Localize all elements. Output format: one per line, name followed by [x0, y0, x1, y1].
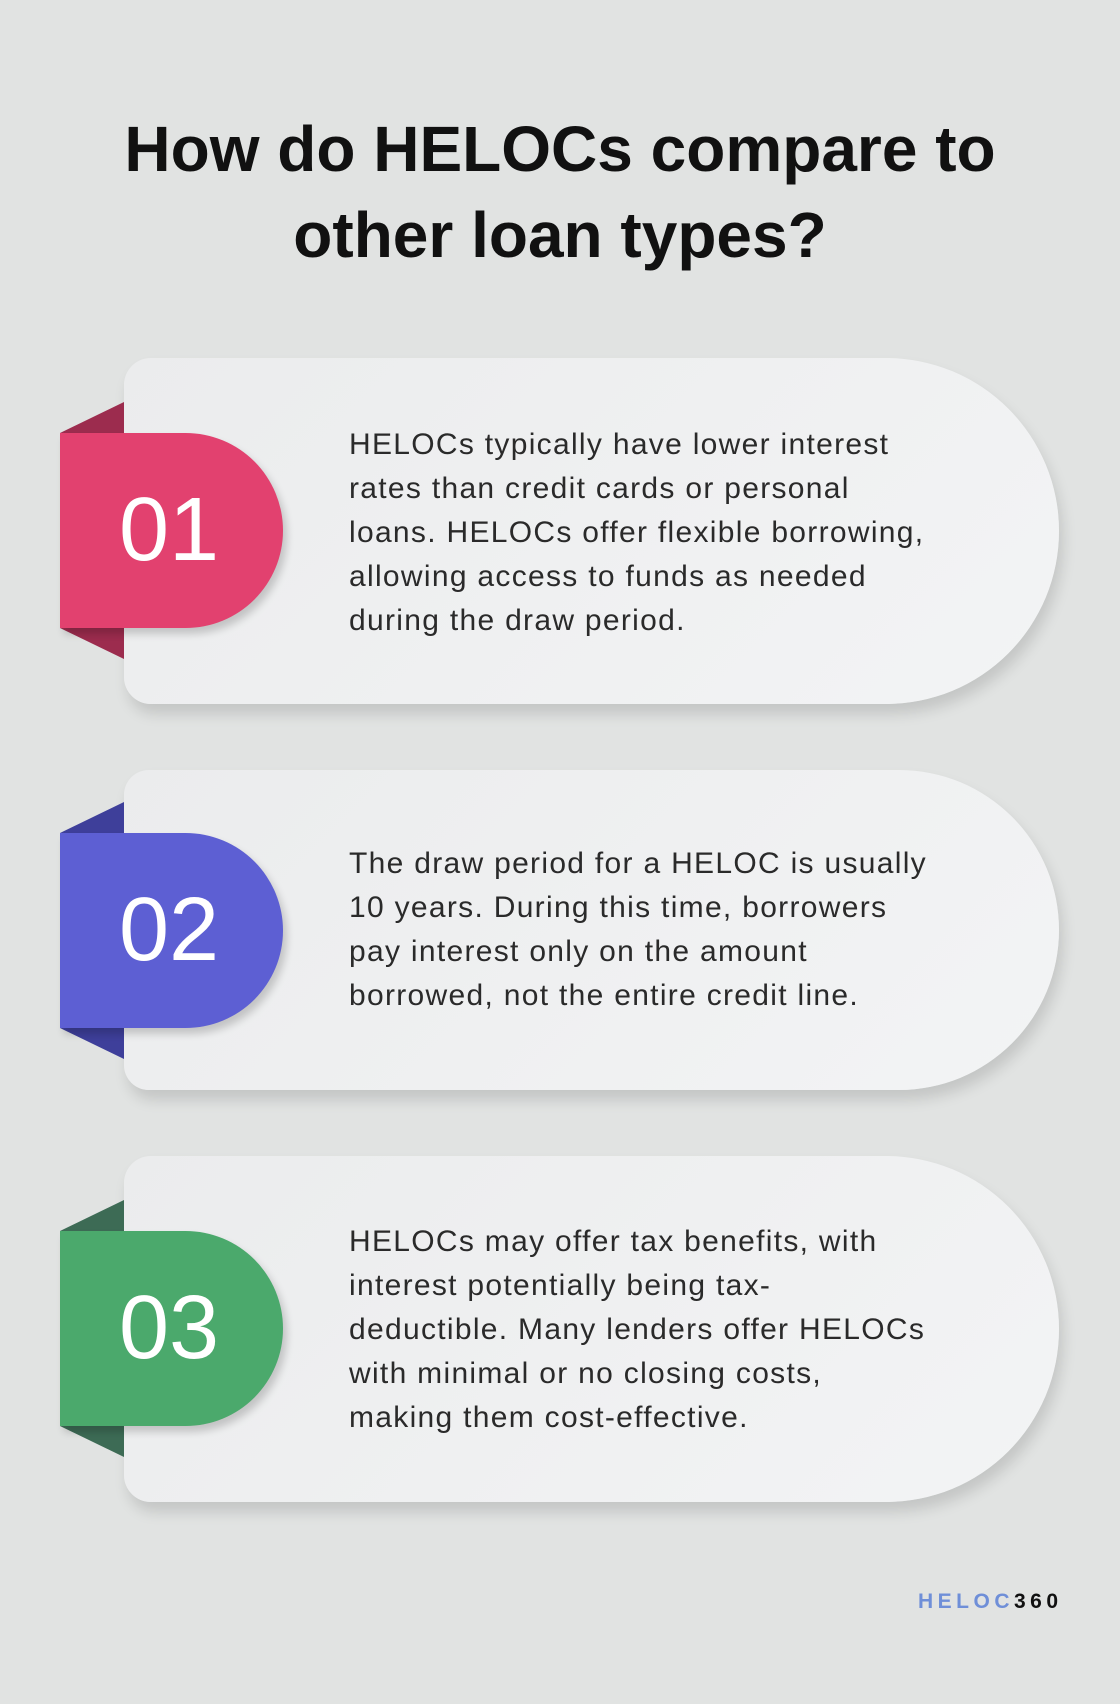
number tab 03 [60, 1231, 283, 1426]
title [124, 113, 996, 271]
text block 2: The draw period for a HELOC is usually [349, 847, 927, 880]
text block 3 [349, 1225, 925, 1434]
text block 1: HELOCs typically have lower interest [349, 428, 889, 461]
text block 1: allowing access to funds as needed [349, 560, 867, 593]
number tab 01 [60, 433, 283, 628]
text block 1: rates than credit cards or personal [349, 472, 850, 505]
text block 3: with minimal or no closing costs, [349, 1357, 822, 1390]
panel: card 1 [124, 358, 1059, 704]
text block 2 [349, 847, 927, 1012]
text block 1: loans. HELOCs offer flexible borrowing, [349, 516, 924, 549]
icon: fold 3 [60, 1200, 124, 1457]
text block 1 [349, 428, 924, 637]
text block 3: making them cost-effective. [349, 1401, 749, 1434]
text block 2: pay interest only on the amount [349, 935, 808, 968]
text block 1: during the draw period. [349, 604, 686, 637]
logo: HELOC360 [918, 1590, 1063, 1613]
text block 3: HELOCs may offer tax benefits, with [349, 1225, 877, 1258]
number tab 01: 01 [119, 480, 219, 580]
text block 2: borrowed, not the entire credit line. [349, 979, 859, 1012]
panel: card 3 [124, 1156, 1059, 1502]
number tab 02 [60, 833, 283, 1028]
icon: fold 1 [60, 402, 124, 659]
panel: card 2 [124, 770, 1059, 1090]
number tab 03: 03 [119, 1278, 219, 1378]
text block 2: 10 years. During this time, borrowers [349, 891, 887, 924]
icon: fold 2 [60, 802, 124, 1059]
number tab 02: 02 [119, 880, 219, 980]
title: other loan types? [293, 199, 827, 271]
title: How do HELOCs compare to [124, 113, 996, 185]
text block 3: deductible. Many lenders offer HELOCs [349, 1313, 925, 1346]
text block 3: interest potentially being tax- [349, 1269, 771, 1302]
